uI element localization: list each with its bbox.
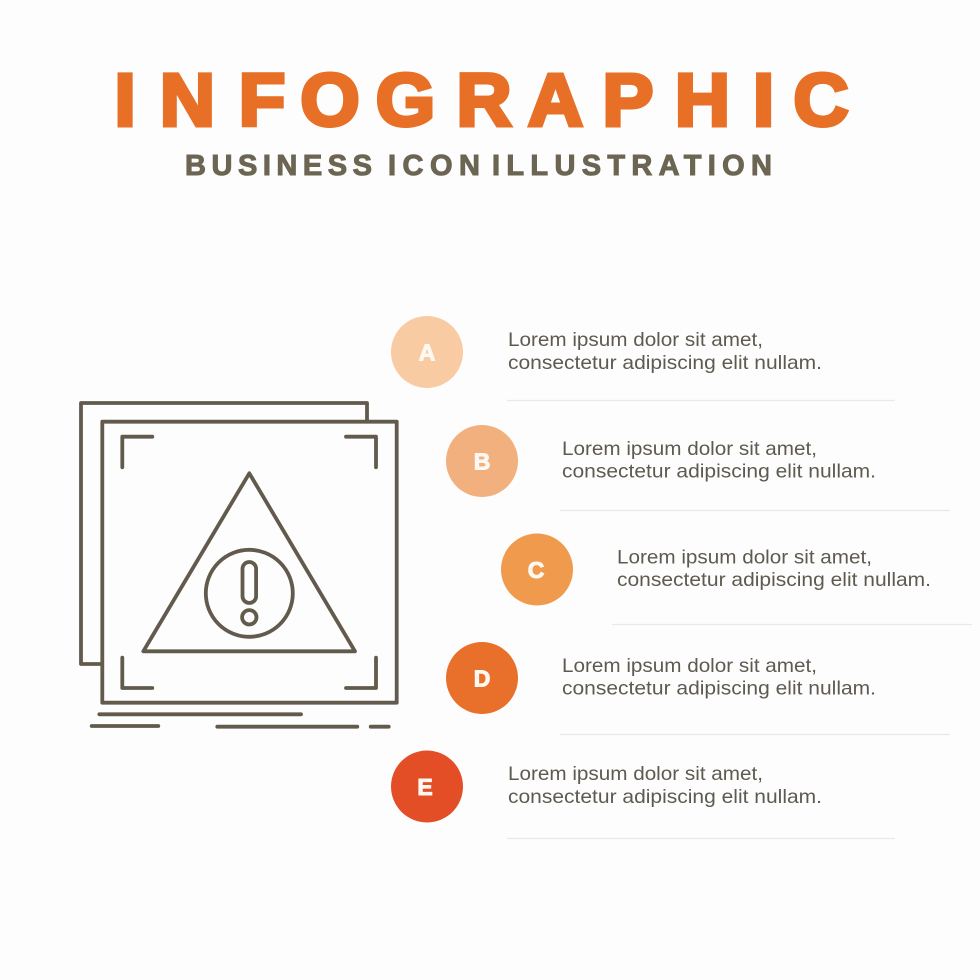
icon: warning on stacked screens [81,403,397,727]
item D: D [474,666,490,692]
item E: consectetur adipiscing elit nullam. [508,786,822,808]
subtitle: ILLUSTRATION [492,150,772,182]
item D [446,642,950,734]
subtitle [185,150,772,182]
item E: Lorem ipsum dolor sit amet, [508,763,763,785]
item E: E [417,774,433,800]
subtitle: BUSINESS [185,150,372,182]
item C: C [528,557,544,583]
item B: Lorem ipsum dolor sit amet, [562,438,817,460]
item A: Lorem ipsum dolor sit amet, [508,329,763,351]
item B: B [474,448,490,474]
item B [446,425,950,510]
item B: consectetur adipiscing elit nullam. [562,460,876,482]
item C: consectetur adipiscing elit nullam. [617,569,931,591]
item A: consectetur adipiscing elit nullam. [508,352,822,374]
item C: Lorem ipsum dolor sit amet, [617,546,872,568]
item A: A [419,340,435,366]
item A [391,316,895,400]
item D: Lorem ipsum dolor sit amet, [562,655,817,677]
item D: consectetur adipiscing elit nullam. [562,678,876,700]
item C [501,534,972,624]
item E [391,750,895,838]
title: INFOGRAPHIC [114,59,849,141]
subtitle: ICON [388,150,480,182]
